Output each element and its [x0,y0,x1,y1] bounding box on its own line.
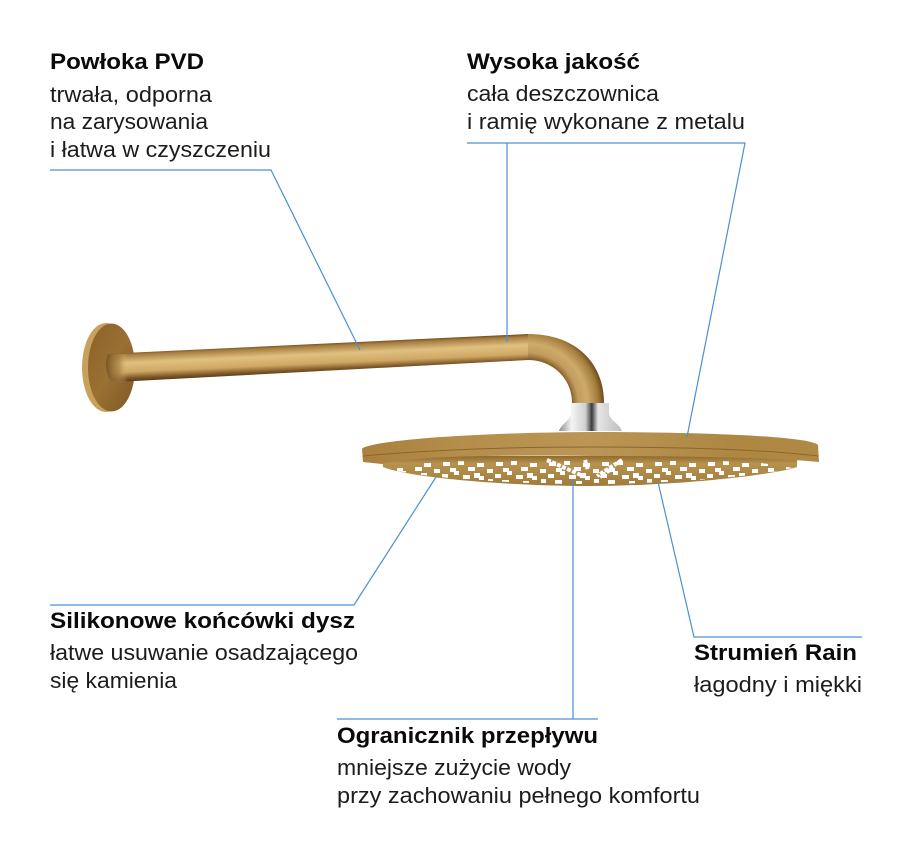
callout: Strumień Rain: Strumień Rain [694,640,857,665]
callout: Strumień Rain [658,482,862,697]
callout: Ogranicznik przepływu: mniejsze zużycie wody [337,755,571,780]
callout: Ogranicznik przepływu: przy zachowaniu pełnego komfortu [337,783,700,808]
callout: Powłoka PVD: trwała, odporna [50,82,213,107]
callout: Wysoka jakość: cała deszczownica [467,81,660,106]
callout: Silikonowe końcówki dysz [50,477,436,693]
shower head disc [362,432,819,464]
callout: Wysoka jakość: i ramię wykonane z metalu [467,109,745,134]
chrome connector [559,403,622,431]
callout: Silikonowe końcówki dysz: Silikonowe końcówki dysz [50,608,355,633]
callout: Powłoka PVD [50,49,360,350]
shower arm [106,334,604,403]
wall plate [82,323,135,412]
callout: Powłoka PVD: na zarysowania [50,109,209,134]
callout: Ogranicznik przepływu [337,480,700,808]
callout: Silikonowe końcówki dysz: łatwe usuwanie osadzającego [50,640,358,665]
callout: Powłoka PVD: i łatwa w czyszczeniu [50,137,271,162]
callout: Ogranicznik przepływu: Ogranicznik przepływu [337,723,598,748]
callout: Wysoka jakość: Wysoka jakość [467,49,640,74]
callout: Silikonowe końcówki dysz: się kamienia [50,668,178,693]
shower product [82,323,819,488]
lower plate with nozzles [382,456,797,488]
callout: Wysoka jakość [467,49,745,437]
callout: Powłoka PVD: Powłoka PVD [50,49,204,74]
callout: Strumień Rain: łagodny i miękki [694,672,862,697]
